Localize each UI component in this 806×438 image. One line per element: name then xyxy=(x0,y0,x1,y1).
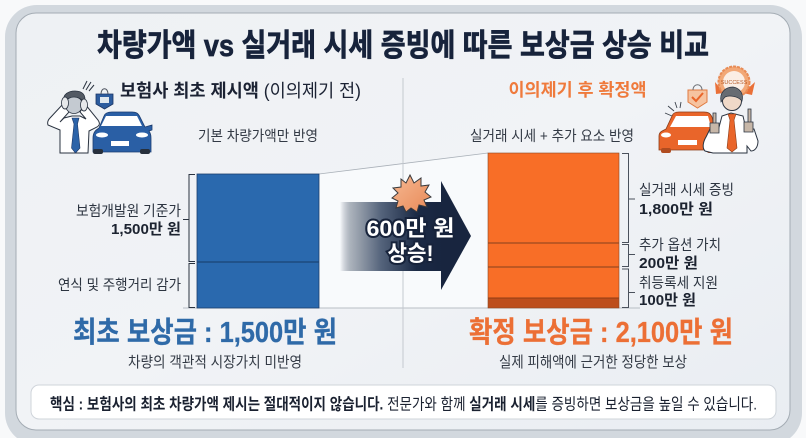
right panel subheading: 실거래 시세 + 추가 요소 반영 xyxy=(470,128,634,145)
label: 취등록세 지원: 100만 원 xyxy=(639,292,696,309)
centre divider xyxy=(402,78,404,368)
label: 실거래 시세 증빙: 실거래 시세 증빙 xyxy=(639,182,734,199)
chart: initial offer bar xyxy=(197,174,319,308)
icon: thumbs up hands xyxy=(710,109,753,133)
callout: key takeaway: 핵심 : 보험사의 최초 차량가액 제시는 절대적이지 않습니다. 전문가와 함께 실거래 시세를 증빙하면 보상금을 높일 수 있습니다. xyxy=(50,394,757,414)
label: 실거래 시세 증빙: 1,800만 원 xyxy=(639,201,713,218)
icon: man's hands xyxy=(62,97,68,109)
icon: man's tie xyxy=(72,118,80,153)
result note: final: 실제 피해액에 근거한 정당한 보상 xyxy=(499,354,687,371)
bar segment: 취등록세 지원 xyxy=(488,267,619,298)
left panel subheading: 기본 차량가액만 반영 xyxy=(198,128,318,145)
icon: worried man with blue car xyxy=(48,81,152,154)
bar segment: 추가 옵션 가치 xyxy=(488,243,619,267)
icon: stress lines xyxy=(83,81,94,91)
bar segment: 연식 및 주행거리 감가 xyxy=(197,262,319,308)
label: 추가 옵션 가치: 추가 옵션 가치 xyxy=(639,237,721,254)
icon: blue shield tag xyxy=(96,94,113,109)
label: 취등록세 지원: 취등록세 지원 xyxy=(639,275,718,292)
icon: man's tie xyxy=(727,114,737,152)
comparison centre background xyxy=(319,153,488,308)
right brackets xyxy=(622,154,635,308)
icon: orange car xyxy=(659,112,716,150)
arrow head xyxy=(441,181,471,290)
result: initial compensation: 최초 보상금 : 1,500만 원 xyxy=(73,316,337,349)
title: 차량가액 vs 실거래 시세 증빙에 따른 보상금 상승 비교 xyxy=(97,28,709,63)
label: 실거래 시세 증빙 xyxy=(639,182,734,218)
icon: blue car xyxy=(93,112,152,152)
icon: orange check shield xyxy=(688,90,707,108)
icon: starburst xyxy=(392,175,431,212)
label: 보험개발원 기준가: 보험개발원 기준가 xyxy=(76,203,181,220)
icon: man's head xyxy=(66,96,82,114)
arrow: increase xyxy=(340,175,471,290)
arrow body xyxy=(340,202,442,271)
left brackets xyxy=(183,174,195,308)
icon: man's shirt and arms xyxy=(703,113,758,153)
left panel heading: 보험사 최초 제시액 (이의제기 전) xyxy=(120,81,361,101)
baseline xyxy=(183,307,640,309)
label: 연식 및 주행거리 감가: 연식 및 주행거리 감가 xyxy=(58,277,181,294)
chart: final amount bar xyxy=(488,153,619,308)
icon: man's head xyxy=(722,92,742,110)
result note: initial: 차량의 객관적 시장가치 미반영 xyxy=(128,354,302,371)
label: 취등록세 지원 xyxy=(639,275,718,309)
icon: man's shirt and raised arms xyxy=(48,104,99,153)
callout: key takeaway xyxy=(31,385,776,419)
result: final compensation: 확정 보상금 : 2,100만 원 xyxy=(469,316,733,349)
bar segment: dark base xyxy=(488,298,619,308)
icon: happy man with orange car xyxy=(659,66,758,153)
label: 보험개발원 기준가: 1,500만 원 xyxy=(111,221,181,238)
arrow label: 600만 원 xyxy=(366,216,454,241)
bar segment: 보험개발원 기준가 xyxy=(197,174,319,262)
connector line top xyxy=(319,153,488,174)
label: 추가 옵션 가치 xyxy=(639,237,721,272)
icon: sparkle lines xyxy=(665,102,681,116)
icon: success badge: SUCCESS xyxy=(721,80,748,86)
right panel heading: 이의제기 후 확정액 xyxy=(508,80,646,100)
label: 추가 옵션 가치: 200만 원 xyxy=(639,255,698,272)
arrow label xyxy=(366,216,454,266)
bar segment: 실거래 시세 증빙 xyxy=(488,153,619,243)
label: 보험개발원 기준가 xyxy=(76,203,181,238)
arrow label: 상승! xyxy=(388,241,434,266)
